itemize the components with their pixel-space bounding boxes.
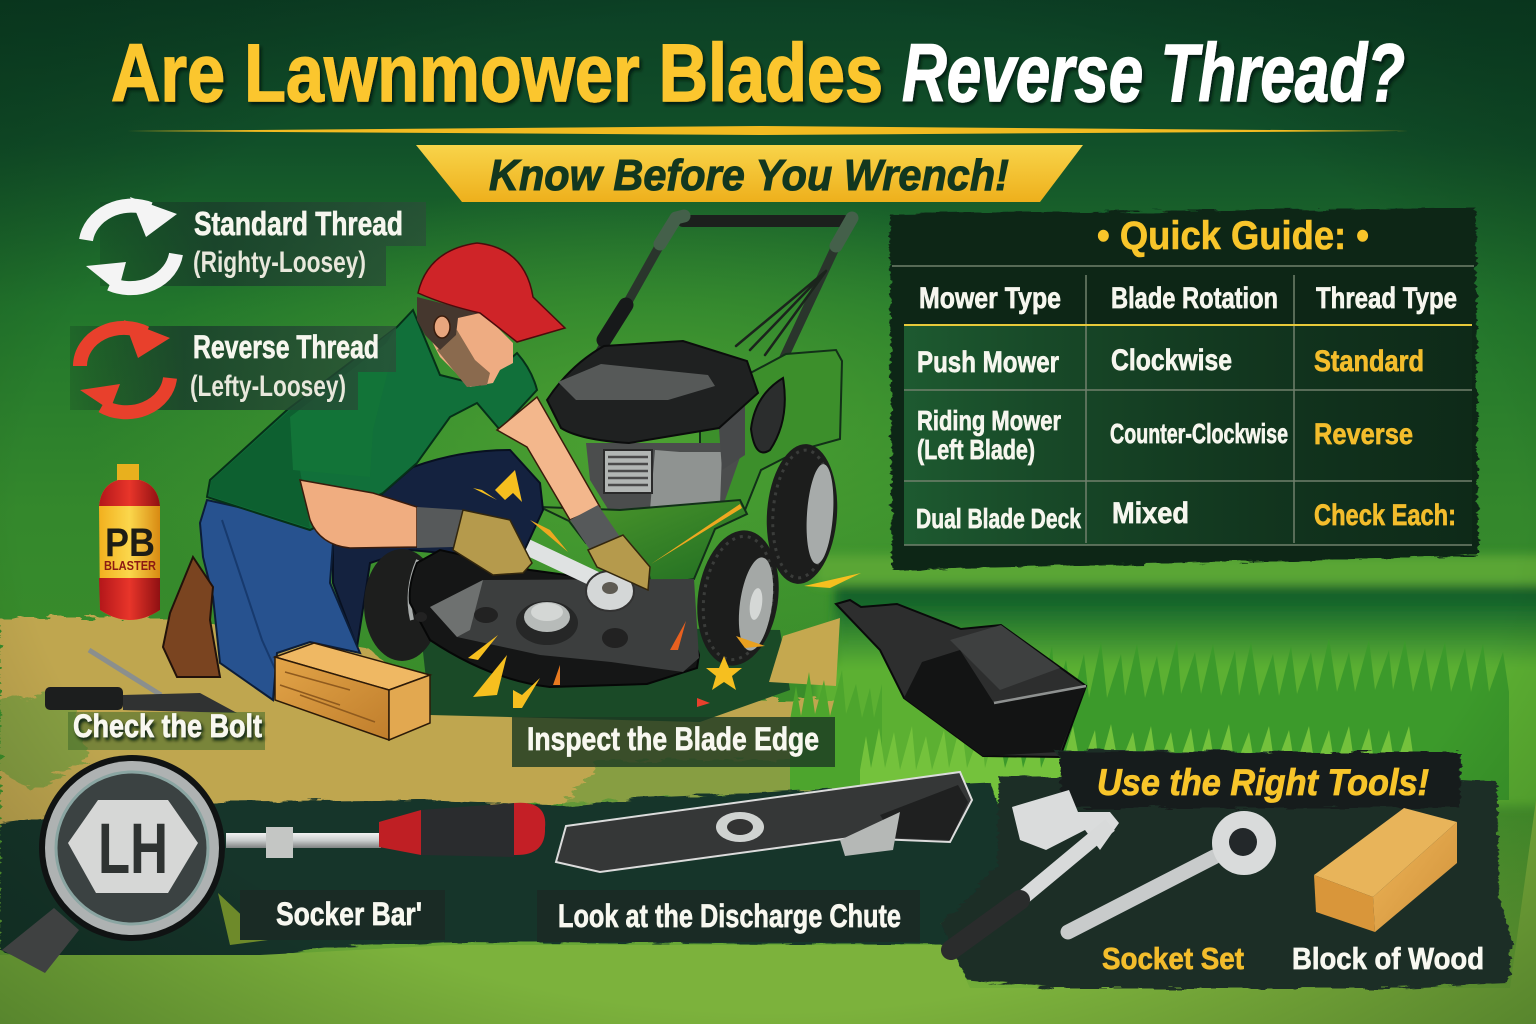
heading: use the right tools: Use the Right Tools! <box>1097 762 1429 803</box>
dark band: lower <box>0 782 1000 966</box>
engine <box>547 341 785 514</box>
legend: reverse thread <box>70 320 396 412</box>
table header: Mower Type <box>919 282 1061 315</box>
table row: riding mower: Riding Mower <box>917 405 1061 436</box>
mower handle <box>597 216 852 368</box>
table row: dual blade deck <box>916 497 1456 534</box>
shirt shadow <box>209 327 397 528</box>
lawn mower <box>540 216 852 586</box>
banner: know before you wrench: Know Before You Wrench! <box>489 151 1009 200</box>
right arm <box>497 397 600 520</box>
block of wood near knee <box>275 643 430 740</box>
label: inspect the blade edge: Inspect the Blade Edge <box>527 721 819 757</box>
magnifying glass: LH: LH <box>98 810 168 889</box>
label: check the bolt: Check the Bolt <box>73 708 262 744</box>
jeans <box>200 500 360 700</box>
legend label background <box>70 326 396 410</box>
tool: breaker bar <box>951 790 1119 950</box>
mower front wheel <box>689 525 787 671</box>
label: socket set: Socket Set <box>1102 941 1244 976</box>
table row: riding mower: Reverse <box>1314 418 1413 451</box>
dark thigh <box>333 450 543 647</box>
table row: riding mower <box>917 405 1413 465</box>
table row: push mower: Clockwise <box>1111 344 1232 377</box>
label: inspect the blade edge <box>512 717 835 767</box>
head <box>417 313 513 387</box>
title: Are Lawnmower Blades <box>111 28 883 119</box>
wrench <box>527 547 634 611</box>
table row: riding mower: Counter-Clockwise <box>1110 418 1288 449</box>
cap <box>418 243 565 342</box>
ear <box>434 316 450 338</box>
legend: standard thread: (Righty-Loosey) <box>193 246 366 279</box>
mower rear wheel <box>762 442 842 586</box>
tool: socket wrench <box>1068 811 1276 932</box>
wrist guards <box>417 507 463 548</box>
tool: block of wood <box>1314 808 1457 932</box>
heading: quick guide: • Quick Guide: • <box>1097 214 1369 258</box>
mower blade <box>556 772 972 872</box>
ground: bottom strip <box>0 800 1536 1024</box>
table row: dual blade deck: Mixed <box>1112 497 1189 530</box>
beard <box>437 330 490 387</box>
panel: use the right tools <box>942 750 1512 988</box>
icon: red arrows <box>80 320 170 412</box>
mechanic: upper body <box>207 243 620 550</box>
can: PB Blaster: PB <box>105 521 155 565</box>
table row: riding mower: (Left Blade) <box>917 434 1035 465</box>
mechanic: legs <box>163 450 543 700</box>
hair <box>417 297 480 350</box>
glass shadow wedge <box>218 893 268 945</box>
mower body rear <box>700 350 842 520</box>
legend label background <box>100 202 426 286</box>
jeans seam <box>222 520 280 680</box>
ground: grass tufts <box>790 638 1509 800</box>
icon: white arrows <box>86 197 177 292</box>
can: PB Blaster: BLASTER <box>104 558 157 573</box>
gloves <box>453 510 650 590</box>
table header: Blade Rotation <box>1111 282 1278 315</box>
magnifying glass: LH <box>2 755 268 973</box>
table row: push mower: Push Mower <box>917 346 1059 379</box>
panel background <box>942 750 1512 988</box>
label: look at the discharge chute: Look at the Discharge Chute <box>558 898 901 934</box>
table row: dual blade deck: Check Each: <box>1314 499 1456 532</box>
table row: push mower <box>917 344 1424 379</box>
sleeve <box>290 335 397 477</box>
yellow sparks and arrows <box>468 470 861 708</box>
panel: quick guide table <box>890 208 1478 570</box>
left arm <box>300 480 417 548</box>
title rule <box>122 126 1408 135</box>
mower rear-left wheel <box>364 549 440 661</box>
boot <box>163 557 220 677</box>
mower underside with blade <box>410 550 699 687</box>
can: PB Blaster <box>99 464 160 620</box>
legend: standard thread <box>86 197 426 292</box>
table header: Thread Type <box>1316 282 1457 315</box>
torso <box>207 310 537 530</box>
table row: push mower: Standard <box>1314 345 1424 378</box>
heading strip <box>1060 752 1460 808</box>
label: socker bar: Socker Bar' <box>276 896 422 932</box>
label: socker bar <box>240 890 445 940</box>
table row: dual blade deck: Dual Blade Deck <box>916 503 1081 534</box>
discharge chute <box>836 600 1086 757</box>
table rows shading <box>904 326 1472 545</box>
legend: reverse thread: Reverse Thread <box>193 329 379 365</box>
label: look at the discharge chute <box>537 890 920 942</box>
table header <box>919 282 1457 315</box>
ground: dirt patch <box>0 618 860 830</box>
label: block of wood: Block of Wood <box>1292 941 1484 976</box>
legend: standard thread: Standard Thread <box>194 205 403 242</box>
table rules <box>892 266 1474 545</box>
legend: reverse thread: (Lefty-Loosey) <box>190 370 346 403</box>
tool: socket bar <box>226 803 545 858</box>
tool: small screwdriver <box>45 650 237 713</box>
mower deck front <box>540 500 747 586</box>
